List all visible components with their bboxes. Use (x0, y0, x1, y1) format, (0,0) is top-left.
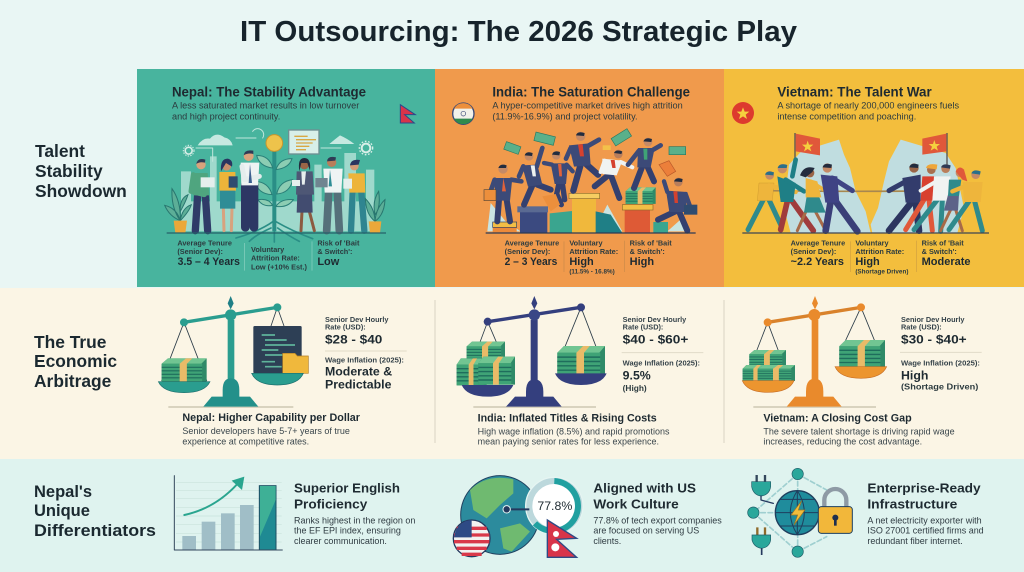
column: India arbitrage (457, 296, 703, 447)
title: IT Outsourcing: The 2026 Strategic Play (240, 16, 797, 48)
person 1 (191, 159, 215, 231)
metrics: India arbitrage: Rate (USD): (623, 322, 663, 331)
person 6 (628, 138, 661, 188)
stats: Vietnam: Attrition Rate: (855, 247, 904, 256)
code bubble (289, 130, 319, 154)
row label: talent stability showdown: Stability (35, 161, 103, 181)
subtitle: India: A hyper-competitive market drives high attrition (492, 101, 683, 111)
stats: Nepal: Attrition Rate: (251, 254, 300, 263)
row label: true economic arbitrage: Economic (34, 351, 117, 371)
stats: Nepal: Voluntary (251, 245, 285, 254)
band background: mint (0, 459, 1024, 572)
text: India arbitrage: mean paying senior rates for less experience. (478, 437, 659, 447)
column: Nepal arbitrage (158, 296, 407, 446)
stats: India: Risk of 'Bait (630, 238, 672, 247)
text: India arbitrage: High wage inflation (8.5%) and rapid promotions (478, 426, 670, 436)
plants (165, 189, 385, 233)
metrics: Vietnam arbitrage: Senior Dev Hourly (901, 315, 965, 324)
rope (771, 188, 951, 194)
icon: Nepal balance scale (158, 296, 308, 407)
stats: Nepal: Low (317, 256, 340, 268)
column: Vietnam arbitrage (742, 296, 982, 447)
row label: Nepal's unique differentiators: Differentiators (34, 522, 156, 540)
person left 2 (777, 160, 813, 231)
heading: enterprise infrastructure: Infrastructure (867, 496, 957, 511)
row label: true economic arbitrage: Arbitrage (34, 371, 112, 391)
metrics: Nepal arbitrage: Predictable (325, 378, 392, 392)
stats: India: High (630, 256, 654, 268)
stats: Nepal: Low (+10% Est.) (251, 263, 308, 272)
heading: Nepal arbitrage: Nepal: Higher Capability per Dollar (182, 412, 360, 424)
illustration: tug of war (742, 133, 989, 233)
panel background: India (435, 69, 724, 287)
text: enterprise infrastructure: A net electricity exporter with (867, 515, 982, 525)
metrics: Nepal arbitrage: Moderate & (325, 364, 392, 378)
text: US work culture: 77.8% of tech export companies (593, 515, 722, 525)
stats: Vietnam (791, 238, 971, 276)
person 5 (315, 157, 343, 231)
heading: India: India: The Saturation Challenge (492, 84, 690, 100)
text: Nepal arbitrage: experience at competitive rates. (182, 436, 309, 446)
band: economic arbitrage (0, 288, 1024, 459)
heading: enterprise infrastructure: Enterprise-Ready (867, 480, 981, 495)
stats: India: High (569, 256, 594, 268)
chart: rising bars (174, 476, 282, 550)
icon: India balance scale (457, 296, 607, 407)
stats: Vietnam: Risk of 'Bait (922, 238, 964, 247)
band background: cream (0, 288, 1024, 459)
stats: Vietnam: Voluntary (855, 238, 890, 247)
illustration: job hopping on podiums (484, 129, 697, 233)
person 7 (658, 178, 697, 231)
row label: Nepal's unique differentiators: Nepal's (34, 483, 92, 501)
differentiator: US work culture (453, 476, 722, 557)
row label: talent stability showdown: Talent (35, 141, 85, 161)
metrics: Nepal arbitrage: Senior Dev Hourly (325, 315, 389, 324)
stats: Nepal: Risk of 'Bait (317, 238, 360, 247)
person right 1 (889, 163, 921, 231)
metrics: Vietnam arbitrage: High (901, 368, 928, 382)
stats: Vietnam: ~2.2 Years (791, 256, 844, 268)
stats: India (505, 238, 672, 276)
metrics: Nepal arbitrage: Rate (USD): (325, 322, 366, 331)
row label: talent stability showdown: Showdown (35, 181, 127, 201)
metrics: Vietnam arbitrage: Rate (USD): (901, 322, 942, 331)
metrics: India arbitrage: Senior Dev Hourly (623, 315, 687, 324)
text: Nepal arbitrage: Senior developers have 5-7+ years of true (182, 426, 350, 436)
heading: English proficiency: Superior English (294, 480, 400, 495)
heading: Vietnam arbitrage: Vietnam: A Closing Cost Gap (763, 413, 912, 425)
flags (795, 133, 947, 170)
text: English proficiency: Ranks highest in the region on (294, 515, 415, 525)
stats: Vietnam: (Shortage Driven) (855, 269, 908, 276)
icon: Vietnam balance scale (742, 296, 887, 407)
metrics: Vietnam arbitrage: $30 - $40+ (901, 333, 967, 347)
metrics: India arbitrage (622, 315, 703, 393)
stats: Nepal: 3.5 – 4 Years (178, 256, 240, 268)
person 3 (544, 151, 573, 205)
icon: India flag (453, 103, 474, 124)
heading: Nepal: Nepal: The Stability Advantage (172, 84, 366, 100)
subtitle: Vietnam: A shortage of nearly 200,000 engineers fuels (777, 101, 959, 111)
text: Vietnam arbitrage: increases, reducing the cost advantage. (763, 437, 922, 447)
metrics: Vietnam arbitrage (900, 315, 982, 391)
subtitle: Vietnam: intense competition and poaching. (777, 111, 916, 121)
person 4 (292, 158, 314, 231)
panel background: Nepal (137, 69, 435, 287)
row label: true economic arbitrage: The True (34, 332, 107, 352)
stats: Vietnam: Moderate (922, 256, 971, 268)
person 2 (219, 159, 238, 231)
stats: Nepal (177, 238, 360, 272)
text: enterprise infrastructure: redundant fiber internet. (867, 536, 963, 546)
icon: globe with 77.8% ring and flags: 77.8% (537, 500, 572, 513)
text: US work culture: clients. (593, 536, 621, 546)
stats: India: (Senior Dev): (505, 247, 550, 256)
stats: Nepal: (Senior Dev): (177, 247, 223, 256)
metrics: Vietnam arbitrage: (Shortage Driven) (901, 381, 979, 391)
heading: Vietnam: Vietnam: The Talent War (777, 84, 932, 100)
text: US work culture: are focused on serving US (593, 526, 699, 536)
stats: Vietnam: & Switch': (922, 247, 957, 256)
tree (236, 135, 313, 242)
stats: India: Average Tenure (505, 238, 559, 247)
subtitle: Nepal: and high project continuity. (172, 111, 280, 121)
text: English proficiency: clearer communication. (294, 536, 387, 546)
heading: US work culture: Work Culture (593, 496, 679, 511)
person right 5 (949, 170, 983, 231)
metrics: India arbitrage: (High) (623, 383, 647, 393)
person right 2 (906, 164, 937, 231)
person left 1 (748, 171, 796, 230)
metrics: India arbitrage: 9.5% (623, 368, 651, 382)
stats: Vietnam: Average Tenure (791, 238, 845, 247)
stats: India: Attrition Rate: (569, 247, 618, 256)
stats: India: (11.5% - 16.8%) (569, 269, 615, 276)
person 4 (566, 132, 599, 191)
flying cash and papers (504, 129, 686, 211)
icon: Vietnam flag (732, 102, 754, 124)
text: English proficiency: the EF EPI index, ensuring (294, 526, 401, 536)
person 3 (241, 150, 259, 227)
metrics: India arbitrage: Wage Inflation (2025): (623, 358, 700, 367)
person right 4 (941, 168, 967, 231)
stats: Nepal: Average Tenure (177, 238, 232, 247)
differentiator: enterprise infrastructure (748, 468, 984, 557)
metrics: India arbitrage: $40 - $60+ (623, 333, 688, 347)
stats: Vietnam: (Senior Dev): (791, 247, 836, 256)
icon: globe network with lock (748, 468, 852, 557)
illustration: team around growing tree (165, 129, 386, 242)
differentiator: English proficiency (174, 476, 415, 550)
panel: India saturation (435, 69, 724, 287)
podiums (493, 187, 668, 233)
stats: India: Voluntary (569, 238, 604, 247)
panel: Nepal stability (137, 69, 435, 287)
person 6 (343, 160, 365, 231)
text: enterprise infrastructure: ISO 27001 certified firms and (867, 526, 984, 536)
icon: globe with 77.8% ring and flags (453, 476, 584, 557)
metrics: Vietnam arbitrage: Wage Inflation (2025): (901, 358, 980, 367)
stats: India: & Switch': (630, 247, 665, 256)
person left 3 (797, 167, 827, 231)
subtitle: Nepal: A less saturated market results in low turnover (172, 101, 359, 111)
subtitle: India: (11.9%-16.9%) and project volatility. (492, 111, 638, 121)
person 5 (595, 150, 632, 198)
icon: Nepal flag (400, 105, 415, 123)
metrics: Nepal arbitrage (325, 315, 407, 392)
heading: India arbitrage: India: Inflated Titles & Rising Costs (478, 413, 657, 425)
metrics: Nepal arbitrage: $28 - $40 (325, 333, 382, 347)
stats: Nepal: & Switch': (317, 247, 352, 256)
band: unique differentiators (0, 459, 1024, 572)
stats: Vietnam: High (855, 256, 880, 268)
row label: Nepal's unique differentiators: Unique (34, 502, 90, 520)
stats: India: 2 – 3 Years (505, 256, 557, 268)
person 1 (484, 164, 521, 221)
text: Vietnam arbitrage: The severe talent shortage is driving rapid wage (763, 426, 955, 436)
panel background: Vietnam (724, 69, 1024, 287)
heading: US work culture: Aligned with US (593, 480, 696, 495)
person 2 (519, 148, 551, 205)
person left 4 (821, 163, 857, 231)
panel: Vietnam talent war (724, 69, 1024, 287)
metrics: Nepal arbitrage: Wage Inflation (2025): (325, 356, 404, 365)
person right 3 (914, 164, 951, 231)
heading: English proficiency: Proficiency (294, 496, 368, 511)
